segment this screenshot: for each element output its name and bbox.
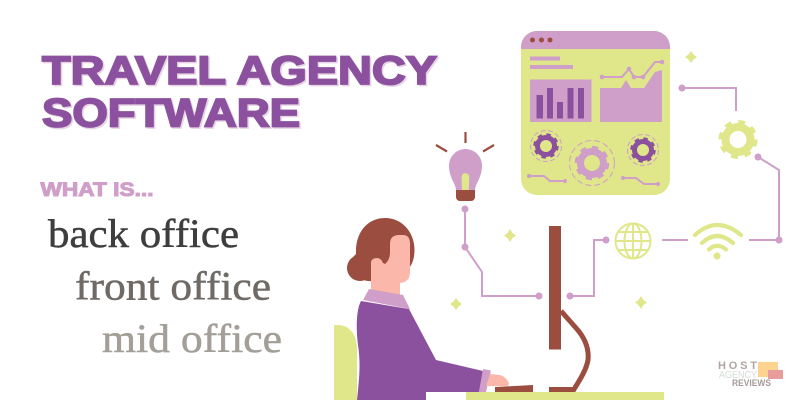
monitor (549, 226, 588, 392)
title (42, 49, 438, 137)
woman (347, 218, 509, 400)
panel body (521, 31, 670, 195)
small circuits (527, 174, 660, 186)
desk (466, 392, 664, 400)
text: back office: back office (48, 211, 239, 256)
chair (334, 325, 357, 400)
text: mid office: mid office (102, 316, 282, 361)
cuff (479, 369, 491, 392)
bar chart (530, 80, 592, 122)
icon: wifi (695, 225, 741, 258)
sparkles (450, 51, 697, 310)
icon: light bulb (436, 132, 494, 201)
icon: large gear (722, 124, 754, 156)
dashboard panel (521, 31, 670, 195)
connector: gear to wifi (749, 154, 782, 244)
monitor stand (561, 311, 588, 391)
subheading: what is: WHAT IS... (40, 180, 154, 201)
window dots (530, 38, 552, 42)
connector: dashboard to gear (678, 84, 736, 111)
logo: Host Agency Reviews (718, 360, 783, 388)
neck and face (371, 235, 410, 298)
connector: wifi to globe (662, 239, 688, 241)
title: TRAVEL AGENCY (42, 49, 437, 93)
keyboard (495, 385, 533, 392)
logo: Host Agency Reviews: REVIEWS (732, 378, 771, 388)
monitor screen (549, 226, 561, 350)
connector: globe to monitor (566, 236, 610, 300)
area and line chart (600, 60, 664, 122)
logo: Host Agency Reviews: AGENCY (719, 370, 757, 381)
hand (486, 374, 509, 386)
hair (351, 218, 414, 281)
gear: right (628, 134, 658, 166)
text: front office: front office (75, 264, 271, 308)
title: SOFTWARE (42, 92, 300, 136)
logo: Host Agency Reviews: HOST (718, 360, 757, 372)
panel header (521, 31, 670, 49)
title: SOFTWARE (44, 93, 302, 137)
title: TRAVEL AGENCY (44, 50, 438, 94)
collar (363, 289, 410, 309)
gear: centre (570, 140, 614, 186)
heading lines (530, 56, 573, 69)
connector: bulb to monitor (462, 206, 542, 300)
body (357, 301, 483, 400)
gear: left (530, 130, 562, 162)
icon: globe (616, 224, 650, 258)
